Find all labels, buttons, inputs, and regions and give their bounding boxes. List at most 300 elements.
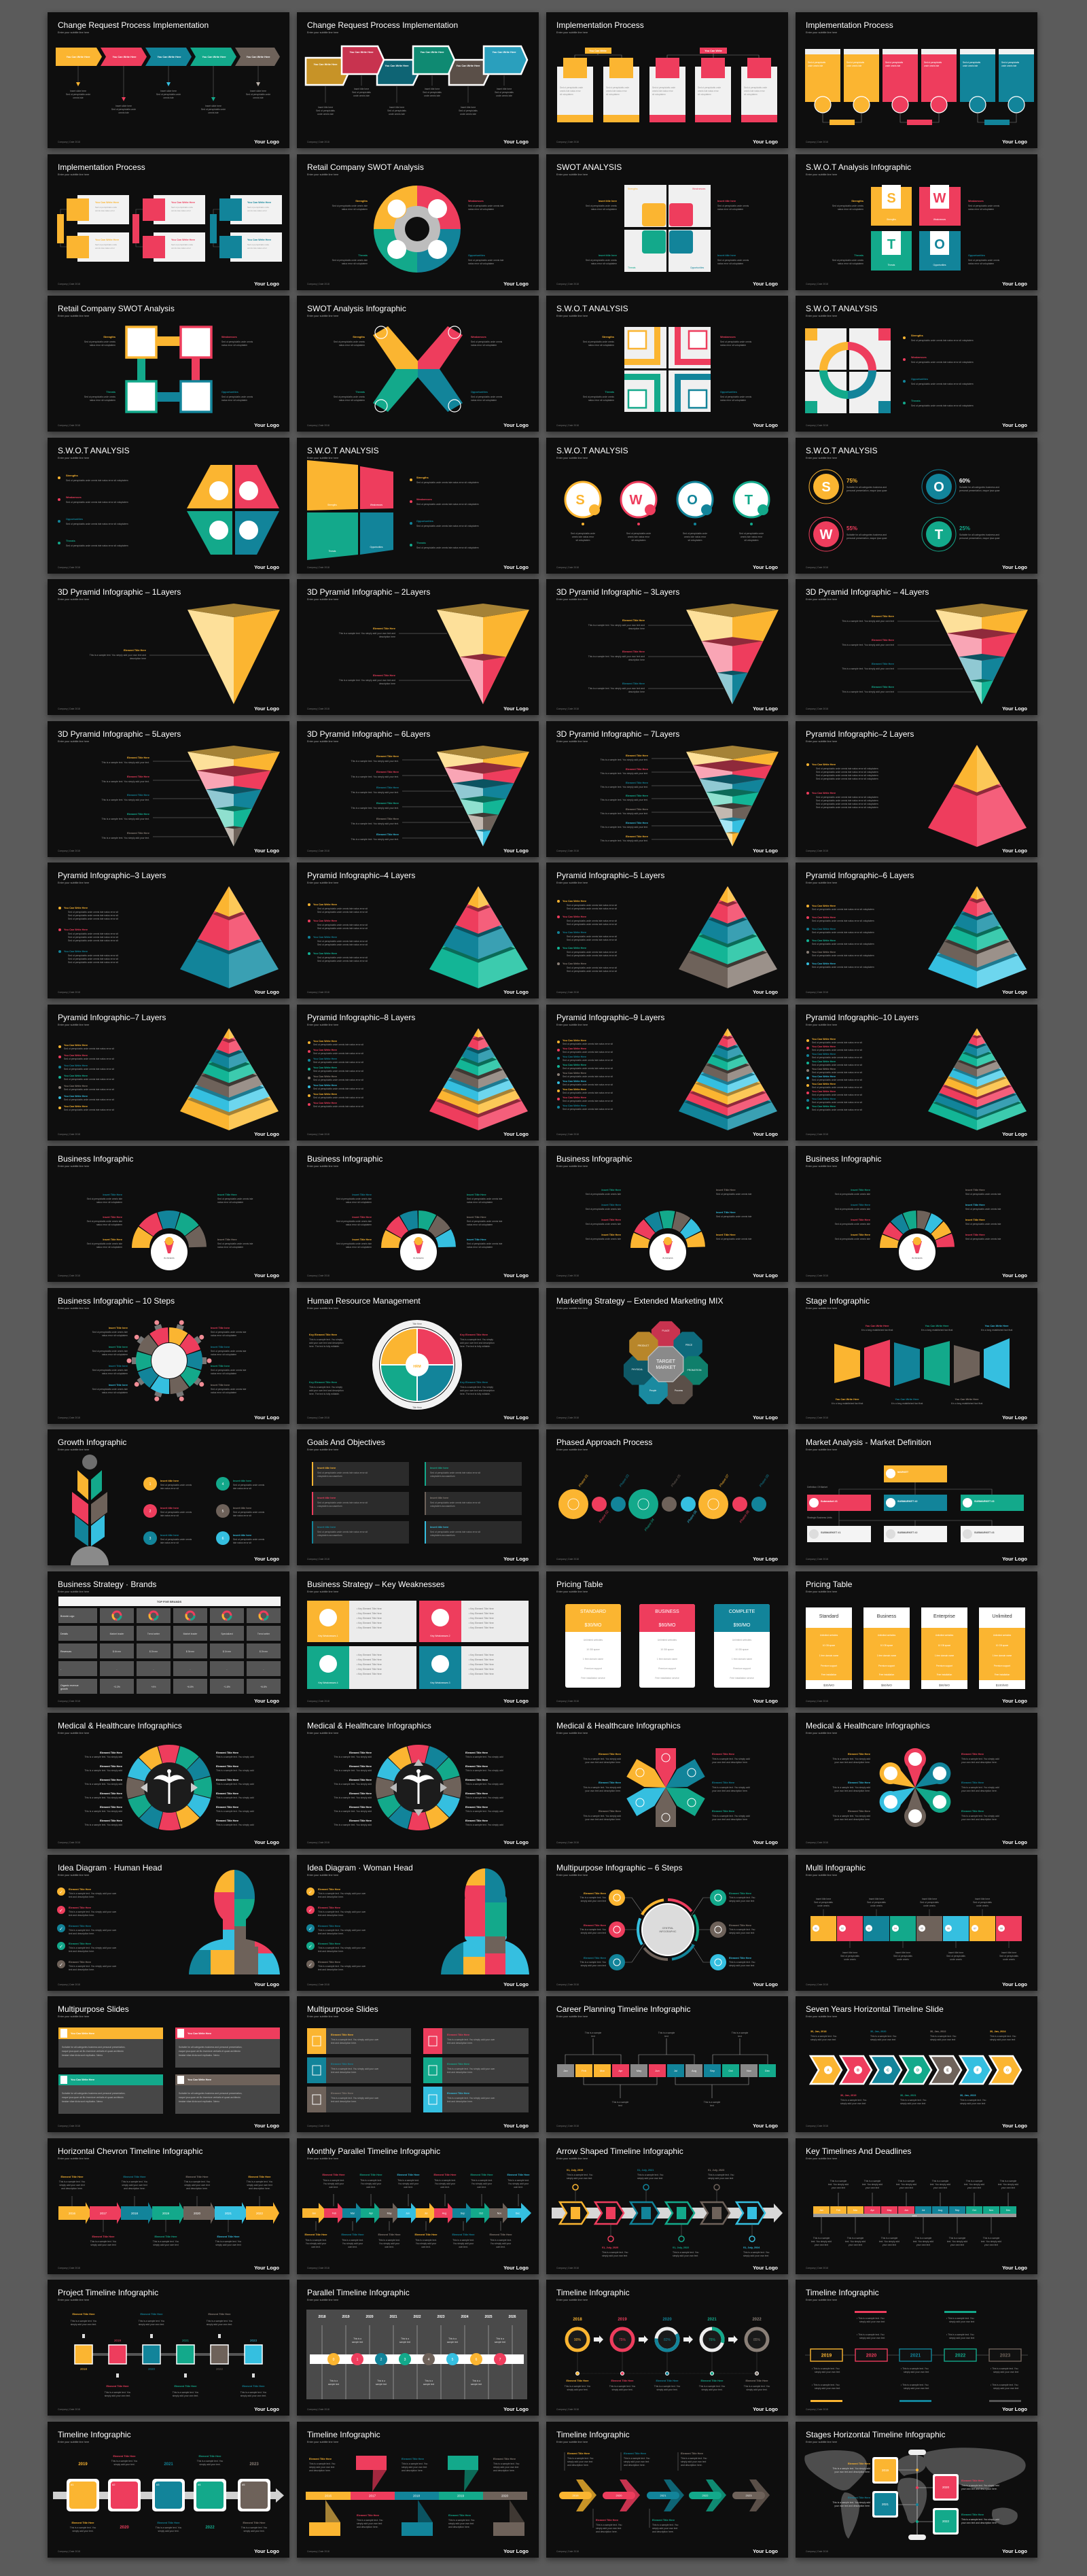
side texts: Sed ut perspiciatis unde omnis iste xyxy=(211,1369,247,1372)
notes xyxy=(814,1898,1018,1961)
framed squares: #2 xyxy=(112,2483,115,2486)
notes: You simply add your xyxy=(491,2242,512,2245)
color blocks: 07 xyxy=(974,1928,976,1930)
list: You Can Write Here xyxy=(64,1054,88,1057)
title: Change Request Process Implementation xyxy=(58,20,209,30)
year notes: simply add your text. xyxy=(72,2530,94,2533)
footer xyxy=(806,989,1027,995)
panel: Multipurpose Slides (6 cards) xyxy=(297,1996,539,2132)
panel: Project Timeline Infographic xyxy=(48,2280,289,2416)
layer labels: This is a sample text. You simply add your text. xyxy=(351,791,399,794)
panel: S.W.O.T ANALYSIS (ring tiles) xyxy=(796,296,1037,432)
framed squares: #3 xyxy=(156,2483,160,2486)
card groups: Sed ut perspiciatis unde xyxy=(171,243,193,246)
deadline notes: your own text xyxy=(849,2244,862,2246)
title: Pyramid Infographic–9 Layers xyxy=(556,1013,664,1022)
side lists: Element Title Here xyxy=(100,1765,122,1768)
footer: Company | Date 2018 xyxy=(806,283,828,285)
cards: Element Title Here xyxy=(331,2034,353,2036)
side texts: natus error sit voluptatem xyxy=(588,344,614,347)
letter circles: W xyxy=(630,493,643,508)
SWOT labels: Sed ut perspiciatis unde omnis iste xyxy=(468,259,504,262)
title: Pyramid Infographic–3 Layers xyxy=(58,871,166,880)
side texts: Key Element Title Here xyxy=(309,1381,337,1384)
footer: Company | Date 2018 xyxy=(806,1558,828,1561)
chevron process bar: You Can Write Here xyxy=(246,56,270,58)
title: Timeline Infographic xyxy=(556,2288,630,2297)
notes: You simply add your xyxy=(342,2242,363,2245)
title: Idea Diagram · Woman Head xyxy=(307,1863,413,1873)
letter blocks: Opportunities xyxy=(933,264,946,266)
deadline notes: This is a sample xyxy=(966,2180,982,2182)
pointers and descriptions: Sed ut perspiciatis unde xyxy=(111,108,136,111)
deadline notes: text. You simply add xyxy=(879,2240,899,2243)
milestones: This is a sample text. You xyxy=(743,2251,770,2254)
side texts: Insert Title Here xyxy=(467,1216,486,1219)
panel: Pyramid Infographic - 2 Layers xyxy=(796,721,1037,857)
columns: Sed ut perspiciatis unde xyxy=(606,86,629,89)
brands table: growth xyxy=(60,1688,68,1690)
list: Sed ut perspiciatis unde omnis iste natus error sit xyxy=(563,1100,613,1102)
numbered list: Sed ut perspiciatis unde omnis xyxy=(233,1484,264,1486)
SWOT labels: natus error sit voluptatem xyxy=(468,208,494,211)
percentage circles xyxy=(809,470,1000,551)
milestones: Element Title Here xyxy=(700,2380,724,2382)
year boxes: 2022 xyxy=(955,2353,965,2359)
footer: Your Logo xyxy=(503,1556,529,1562)
pricing columns: 10 GB space xyxy=(823,1644,835,1647)
panel: S.W.O.T ANALYSIS (letter circles) xyxy=(546,438,788,574)
list: Sed ut perspiciatis unde omnis iste natus error sit xyxy=(317,924,368,926)
phase labels: Phase 06 xyxy=(687,1510,698,1524)
notes: This is a sample text. You xyxy=(448,2519,475,2522)
percentage circles: Suitable for all categories business and xyxy=(847,486,887,489)
list xyxy=(806,763,878,809)
notes: Element Title Here xyxy=(242,2385,265,2388)
footer: Company | Date 2018 xyxy=(307,1841,329,1844)
milestones: Element Title Here xyxy=(745,2380,768,2382)
descriptions: unde omnis iste xyxy=(317,113,334,116)
footer: Company | Date 2018 xyxy=(58,283,80,285)
side texts: Threats xyxy=(106,391,115,394)
descriptions: omnis iste natus error xyxy=(628,536,650,538)
deadline notes: This is a sample xyxy=(898,2180,914,2182)
layer labels: This is a sample text. You simply add your own text and xyxy=(588,655,645,658)
milestones: 01, July, 2024 xyxy=(743,2246,760,2249)
list: You Can Write Here xyxy=(64,1075,88,1077)
step texts: This is a sample text. You xyxy=(729,1961,755,1964)
center bulb: BUSINESS xyxy=(164,1257,175,1259)
footer: Your Logo xyxy=(753,2548,778,2554)
columns: sit voluptatem xyxy=(606,93,620,96)
medical ring xyxy=(121,1739,217,1836)
notes: You simply add your xyxy=(379,2242,400,2245)
checklist: This is a sample text. You simply add your own xyxy=(318,1929,366,1932)
year notes: simply add your text. xyxy=(113,2463,135,2466)
footer xyxy=(556,1698,778,1704)
octagon cluster: PROMOTION xyxy=(688,1369,702,1372)
side texts: Threats xyxy=(854,254,863,257)
panel: S.W.O.T ANALYSIS (L frames) xyxy=(546,296,788,432)
title: Enter your subtitle line here xyxy=(58,1874,89,1877)
dates: This is a sample text. You xyxy=(990,2035,1016,2038)
deadline notes: This is a sample xyxy=(949,2237,965,2240)
list: You Can Write Here xyxy=(64,1044,88,1047)
list: You Can Write Here xyxy=(563,1047,586,1050)
notes: You simply add your xyxy=(508,2182,529,2185)
side texts: Insert Title Here xyxy=(217,1238,237,1241)
side lists: This is a sample text. You simply add xyxy=(334,1796,372,1799)
month boxes: Apr xyxy=(618,2069,623,2072)
footer: Company | Date 2018 xyxy=(58,141,80,143)
brands table: Market leader xyxy=(183,1633,198,1635)
list: Sed ut perspiciatis unde omnis iste natus error sit xyxy=(68,954,118,957)
half fan xyxy=(380,1209,457,1287)
list: You Can Write Here xyxy=(812,1038,836,1041)
numbered list: 5 xyxy=(222,1510,224,1514)
layer labels: This is a sample text. You simply add your text. xyxy=(102,761,149,764)
percentage circles: personal presentation, eaque ipsa quae xyxy=(959,537,1000,540)
brands table: +6.8% xyxy=(187,1686,194,1688)
weakness cards: • Key Element Title Here xyxy=(469,1654,494,1656)
list: Weaknesses xyxy=(66,496,82,499)
side texts xyxy=(336,1194,503,1249)
layer labels xyxy=(351,755,478,841)
panel: Implementation Process (6 panels) xyxy=(796,12,1037,148)
step labels: You Can Write Here xyxy=(349,51,374,54)
year boxes xyxy=(805,2311,1028,2402)
SWOT labels: Sed ut perspiciatis unde omnis iste xyxy=(332,259,368,262)
brands table xyxy=(58,1597,281,1694)
numbered list: Sed ut perspiciatis unde omnis xyxy=(160,1538,192,1541)
letter markers: G xyxy=(1006,2069,1009,2073)
arrow markers: 2022 xyxy=(702,2494,709,2497)
notes: This is a sample text. xyxy=(360,2179,382,2182)
card groups: omnis iste natus error xyxy=(171,209,191,212)
title: Enter your subtitle line here xyxy=(806,457,837,459)
title: Multi Infographic xyxy=(806,1863,866,1873)
side texts: This is a sample text. You simply xyxy=(309,1338,342,1341)
month arrows: Jun xyxy=(406,2212,410,2214)
footer: Company | Date 2018 xyxy=(307,708,329,710)
footer: Your Logo xyxy=(1002,1414,1027,1421)
deadline notes: text. You simply add xyxy=(845,2240,866,2243)
descriptions: sit voluptatem xyxy=(688,539,702,542)
footer xyxy=(806,1272,1027,1278)
deadline notes: This is a sample xyxy=(932,2180,948,2182)
card groups: Sed ut perspiciatis unde xyxy=(95,243,117,246)
inverted pyramid xyxy=(686,746,779,846)
list: You Can Write Here xyxy=(64,950,88,953)
title: Enter your subtitle line here xyxy=(307,2157,338,2160)
footer: Your Logo xyxy=(254,281,279,287)
footer: Your Logo xyxy=(1002,2548,1027,2554)
goal boxes: Insert title here xyxy=(430,1526,448,1529)
bullet notes: simply add your own text xyxy=(859,2337,885,2339)
side texts: Sed ut perspiciatis unde omnis iste xyxy=(217,1242,253,1245)
descriptions: Sed ut perspiciatis unde xyxy=(571,532,595,535)
title: Project Timeline Infographic xyxy=(58,2288,158,2297)
numbered list: Sed ut perspiciatis unde omnis xyxy=(160,1511,192,1514)
dates: 30, Jan, 2023 xyxy=(960,2094,976,2097)
HRM circle: Title Here xyxy=(412,1323,422,1325)
panel: Timeline Infographic (year boxes) xyxy=(796,2280,1037,2416)
title: Enter your subtitle line here xyxy=(58,2441,89,2443)
notes: Insert title here xyxy=(975,1898,990,1900)
list xyxy=(308,903,368,962)
layer labels: Element Title Here xyxy=(626,808,648,811)
list: Sed ut perspiciatis unde omnis iste natus error sit voluptatem xyxy=(911,361,974,364)
side texts: add your own text and description xyxy=(460,1389,495,1392)
footer: Company | Date 2018 xyxy=(307,850,329,852)
footer xyxy=(307,139,529,145)
side texts: Opportunities xyxy=(968,254,985,257)
weakness cards: • Key Element Title Here xyxy=(469,1658,494,1661)
side texts: This is a sample text. You simply add xyxy=(712,1786,750,1789)
list: Sed ut perspiciatis unde omnis iste natus error sit voluptatem xyxy=(66,523,128,525)
list: Sed ut perspiciatis unde omnis iste natus error sit xyxy=(68,936,118,939)
list: Sed ut perspiciatis unde omnis iste natus error sit xyxy=(313,1043,363,1046)
pointers and descriptions: Sed ut perspiciatis unde xyxy=(246,93,270,96)
notes: This is a sample text. You xyxy=(247,2180,272,2183)
footer: Your Logo xyxy=(503,1981,529,1987)
footer: Your Logo xyxy=(753,1981,778,1987)
numbered list: 6 xyxy=(222,1537,224,1541)
list: Threats xyxy=(416,542,426,544)
footer: Company | Date 2018 xyxy=(806,1133,828,1136)
title: Enter your subtitle line here xyxy=(806,2441,837,2443)
card groups: You Can Write Here xyxy=(171,239,195,241)
title: Enter your subtitle line here xyxy=(556,740,588,743)
deadline notes: text. You simply add xyxy=(947,2240,967,2243)
milestones: simply add your text. xyxy=(701,2388,723,2391)
market tree: SUBMARKET #2 xyxy=(897,1500,918,1503)
list: Sed ut perspiciatis unde omnis iste natus error sit xyxy=(812,1086,862,1089)
notes: This is a sample text. You xyxy=(596,2524,622,2526)
panel: Phased Approach Process xyxy=(546,1429,788,1565)
footer xyxy=(556,422,778,428)
brands table: +4% xyxy=(152,1686,156,1688)
side texts: Element Title Here xyxy=(961,1781,984,1784)
title: Implementation Process xyxy=(58,162,145,172)
month bar: May xyxy=(887,2209,892,2212)
year rings: 2018 xyxy=(573,2318,582,2322)
timeline panel: 2019 xyxy=(342,2315,350,2319)
timeline panel: 2021 xyxy=(389,2315,397,2319)
side lists: This is a sample text. You simply add xyxy=(465,1769,503,1772)
side texts: Element Title Here xyxy=(599,1781,621,1784)
side texts: Insert Title Here xyxy=(467,1238,486,1241)
side texts: natus error sit voluptatem xyxy=(838,208,863,211)
panel: Business Infographic (6 segments) xyxy=(297,1146,539,1282)
cards: Element Title Here xyxy=(331,2063,353,2066)
notes: own text. xyxy=(348,2246,357,2248)
footer: Your Logo xyxy=(1002,1839,1027,1845)
notes: unde omnis xyxy=(844,1958,856,1961)
brackets and notes: This is a sample xyxy=(612,2101,628,2104)
notes: simply add your own text xyxy=(493,2466,518,2469)
side texts: Sed ut perspiciatis unde omnis iste xyxy=(336,1242,372,1245)
notes: Insert title here xyxy=(922,1898,937,1900)
goal boxes: Sed ut perspiciatis unde omnis iste natus error sit xyxy=(317,1501,368,1504)
bullet notes: • This is a sample text. You xyxy=(857,2317,885,2320)
arrows: 2019 xyxy=(162,2212,170,2215)
side lists: Element Title Here xyxy=(216,1806,238,1809)
footer xyxy=(806,1839,1027,1845)
title: Enter your subtitle line here xyxy=(806,1874,837,1877)
notes: This is a sample text. You xyxy=(493,2462,520,2465)
year notes: This is a sample text. You xyxy=(111,2460,137,2462)
phase circles xyxy=(558,1489,766,1519)
pricing columns: Business xyxy=(877,1614,897,1619)
footer: Company | Date 2018 xyxy=(58,991,80,994)
brands table: - xyxy=(60,1668,62,1671)
month arrows: Jan xyxy=(312,2212,316,2214)
step texts: Element Title Here xyxy=(584,1957,606,1960)
panel: 3D Pyramid Infographic - 5Layers xyxy=(48,721,289,857)
X ribbons xyxy=(373,326,463,412)
footer: Your Logo xyxy=(753,1839,778,1845)
title: Horizontal Chevron Timeline Infographic xyxy=(58,2146,202,2156)
list: Sed ut perspiciatis unde omnis iste natus error sit xyxy=(812,1071,862,1074)
side texts: natus error sit voluptatem xyxy=(346,1201,372,1204)
footer: Your Logo xyxy=(1002,139,1027,145)
month arrows: Oct xyxy=(479,2212,483,2214)
octagon cluster: PRICE xyxy=(685,1344,693,1346)
month boxes: Mar xyxy=(600,2069,605,2072)
pointers and descriptions: Sed ut perspiciatis unde xyxy=(201,108,226,111)
notes: unde omnis xyxy=(1003,1958,1015,1961)
side lists: Element Title Here xyxy=(465,1820,488,1822)
checklist: text and description here. xyxy=(318,1932,344,1935)
pricing columns: Premium support xyxy=(936,1665,952,1667)
notes: own text. xyxy=(404,2186,413,2189)
side texts: This is a sample text. You simply xyxy=(460,1386,493,1389)
month bar xyxy=(813,2206,1016,2217)
step texts: simply add your own text xyxy=(581,1900,606,1902)
list: You Can Write Here xyxy=(812,1045,836,1048)
brands table: - xyxy=(190,1668,191,1671)
side lists: This is a sample text. You simply add xyxy=(84,1796,122,1799)
step labels: You Can Write Here xyxy=(313,63,338,66)
weakness cards: • Key Element Title Here xyxy=(469,1663,494,1666)
deadline notes: your own text xyxy=(832,2187,845,2189)
title xyxy=(806,1580,853,1593)
footer xyxy=(307,706,529,712)
panel: Stages Horizontal Timeline Infographic xyxy=(796,2422,1037,2558)
footer xyxy=(58,2406,279,2412)
notes: simply add your own text. xyxy=(173,2395,198,2397)
cards: text and description here. xyxy=(331,2042,357,2044)
milestones: 01, July, 2023 xyxy=(708,2169,724,2172)
side texts: Insert Title Here xyxy=(103,1194,122,1196)
footer: Your Logo xyxy=(503,422,529,428)
month bar: Nov xyxy=(989,2209,993,2212)
title: Enter your subtitle line here xyxy=(806,882,837,884)
footer: Your Logo xyxy=(753,422,778,428)
footer: Company | Date 2018 xyxy=(58,566,80,569)
footer: Company | Date 2018 xyxy=(556,991,579,994)
cards: Suitable for all categories business and personal presentation, xyxy=(179,2092,243,2095)
year notes: This is a sample text. You xyxy=(156,2526,181,2529)
list: Sed ut perspiciatis unde omnis iste natus error sit xyxy=(68,914,118,917)
numbered list: 2 xyxy=(149,1510,152,1514)
title: Enter your subtitle line here xyxy=(58,2157,89,2160)
dates: simply add your own text xyxy=(960,2102,985,2105)
side texts: Sed ut perspiciatis unde omnis iste xyxy=(87,1220,122,1223)
descriptions xyxy=(316,75,514,116)
deadline notes: text. You simply add xyxy=(811,2240,832,2243)
footer: Your Logo xyxy=(503,706,529,712)
chevron process bar: You Can Write Here xyxy=(112,56,137,58)
percentage circles: personal presentation, eaque ipsa quae xyxy=(847,537,887,540)
layer labels: This is a sample text. You simply add your own text and xyxy=(588,687,645,690)
notes: and description here. xyxy=(402,2469,423,2472)
percentage circles: O xyxy=(933,480,944,495)
title: Enter your subtitle line here xyxy=(806,1165,837,1168)
footer xyxy=(556,706,778,712)
notes: Element Title Here xyxy=(140,2313,163,2316)
brands table: TOP FIVE BRANDS xyxy=(157,1600,181,1603)
timeline panel: 6 xyxy=(476,2358,478,2362)
descriptions: Sed ut perspiciatis xyxy=(423,91,442,94)
HRM circle: HRM xyxy=(413,1365,421,1369)
list: Sed ut perspiciatis unde omnis iste natus error sit xyxy=(313,1061,363,1064)
dates xyxy=(810,2030,1016,2105)
descriptions: Insert title here xyxy=(389,106,404,109)
footer: Your Logo xyxy=(254,2548,279,2554)
chevron process bar: You Can Write Here xyxy=(66,56,90,58)
footer xyxy=(307,422,529,428)
footer: Your Logo xyxy=(753,1131,778,1137)
layer labels: This is a sample text. You simply add your text. xyxy=(601,786,648,788)
footer: Company | Date 2018 xyxy=(307,566,329,569)
side texts: Sed ut perspiciatis unde omnis iste xyxy=(211,1331,247,1334)
title: 3D Pyramid Infographic – 5Layers xyxy=(58,729,181,739)
stage notes: Element Title Here xyxy=(848,2496,870,2499)
title: Enter your subtitle line here xyxy=(556,1024,588,1026)
panel: Stage Infographic xyxy=(796,1288,1037,1424)
list: Sed ut perspiciatis unde omnis iste natus error sit xyxy=(567,904,617,907)
brands table: - xyxy=(116,1668,118,1671)
milestones: simply add your own text xyxy=(673,2255,698,2257)
footer: Company | Date 2018 xyxy=(307,1416,329,1419)
milestones xyxy=(565,2352,770,2391)
month bar: Dec xyxy=(1006,2209,1010,2212)
list: Sed ut perspiciatis unde omnis iste natus error sit xyxy=(313,1079,363,1081)
footer: Company | Date 2018 xyxy=(556,708,579,710)
cards: eaque ipsa quae ab illo inventore veritatis et quasi architecto xyxy=(179,2096,240,2099)
layer labels xyxy=(339,627,470,685)
side texts: Insert Title here xyxy=(109,1327,128,1329)
layer labels: This is a sample text. You simply add your own text and xyxy=(588,624,645,627)
side texts: Insert Title here xyxy=(211,1365,230,1368)
list: Sed ut perspiciatis unde omnis iste natus error sit xyxy=(563,1075,613,1078)
cards: text and description here. xyxy=(447,2100,473,2103)
side texts: Sed ut perspiciatis unde omnis xyxy=(586,205,617,207)
stage cards: 2022 xyxy=(942,2520,950,2523)
side texts: This is a sample text. You simply add xyxy=(832,1815,870,1817)
side texts: Key Element Title Here xyxy=(460,1381,488,1384)
numbered list: iste natus error sit xyxy=(160,1542,179,1544)
side texts: add your own text and description xyxy=(309,1342,344,1344)
HRM circle: Title Here xyxy=(412,1406,422,1409)
center bulb xyxy=(400,1234,437,1270)
side texts: Insert Title Here xyxy=(965,1189,985,1191)
month arrows: Sep xyxy=(461,2212,465,2214)
side texts xyxy=(583,336,751,402)
title: Timeline Infographic xyxy=(307,2430,380,2439)
